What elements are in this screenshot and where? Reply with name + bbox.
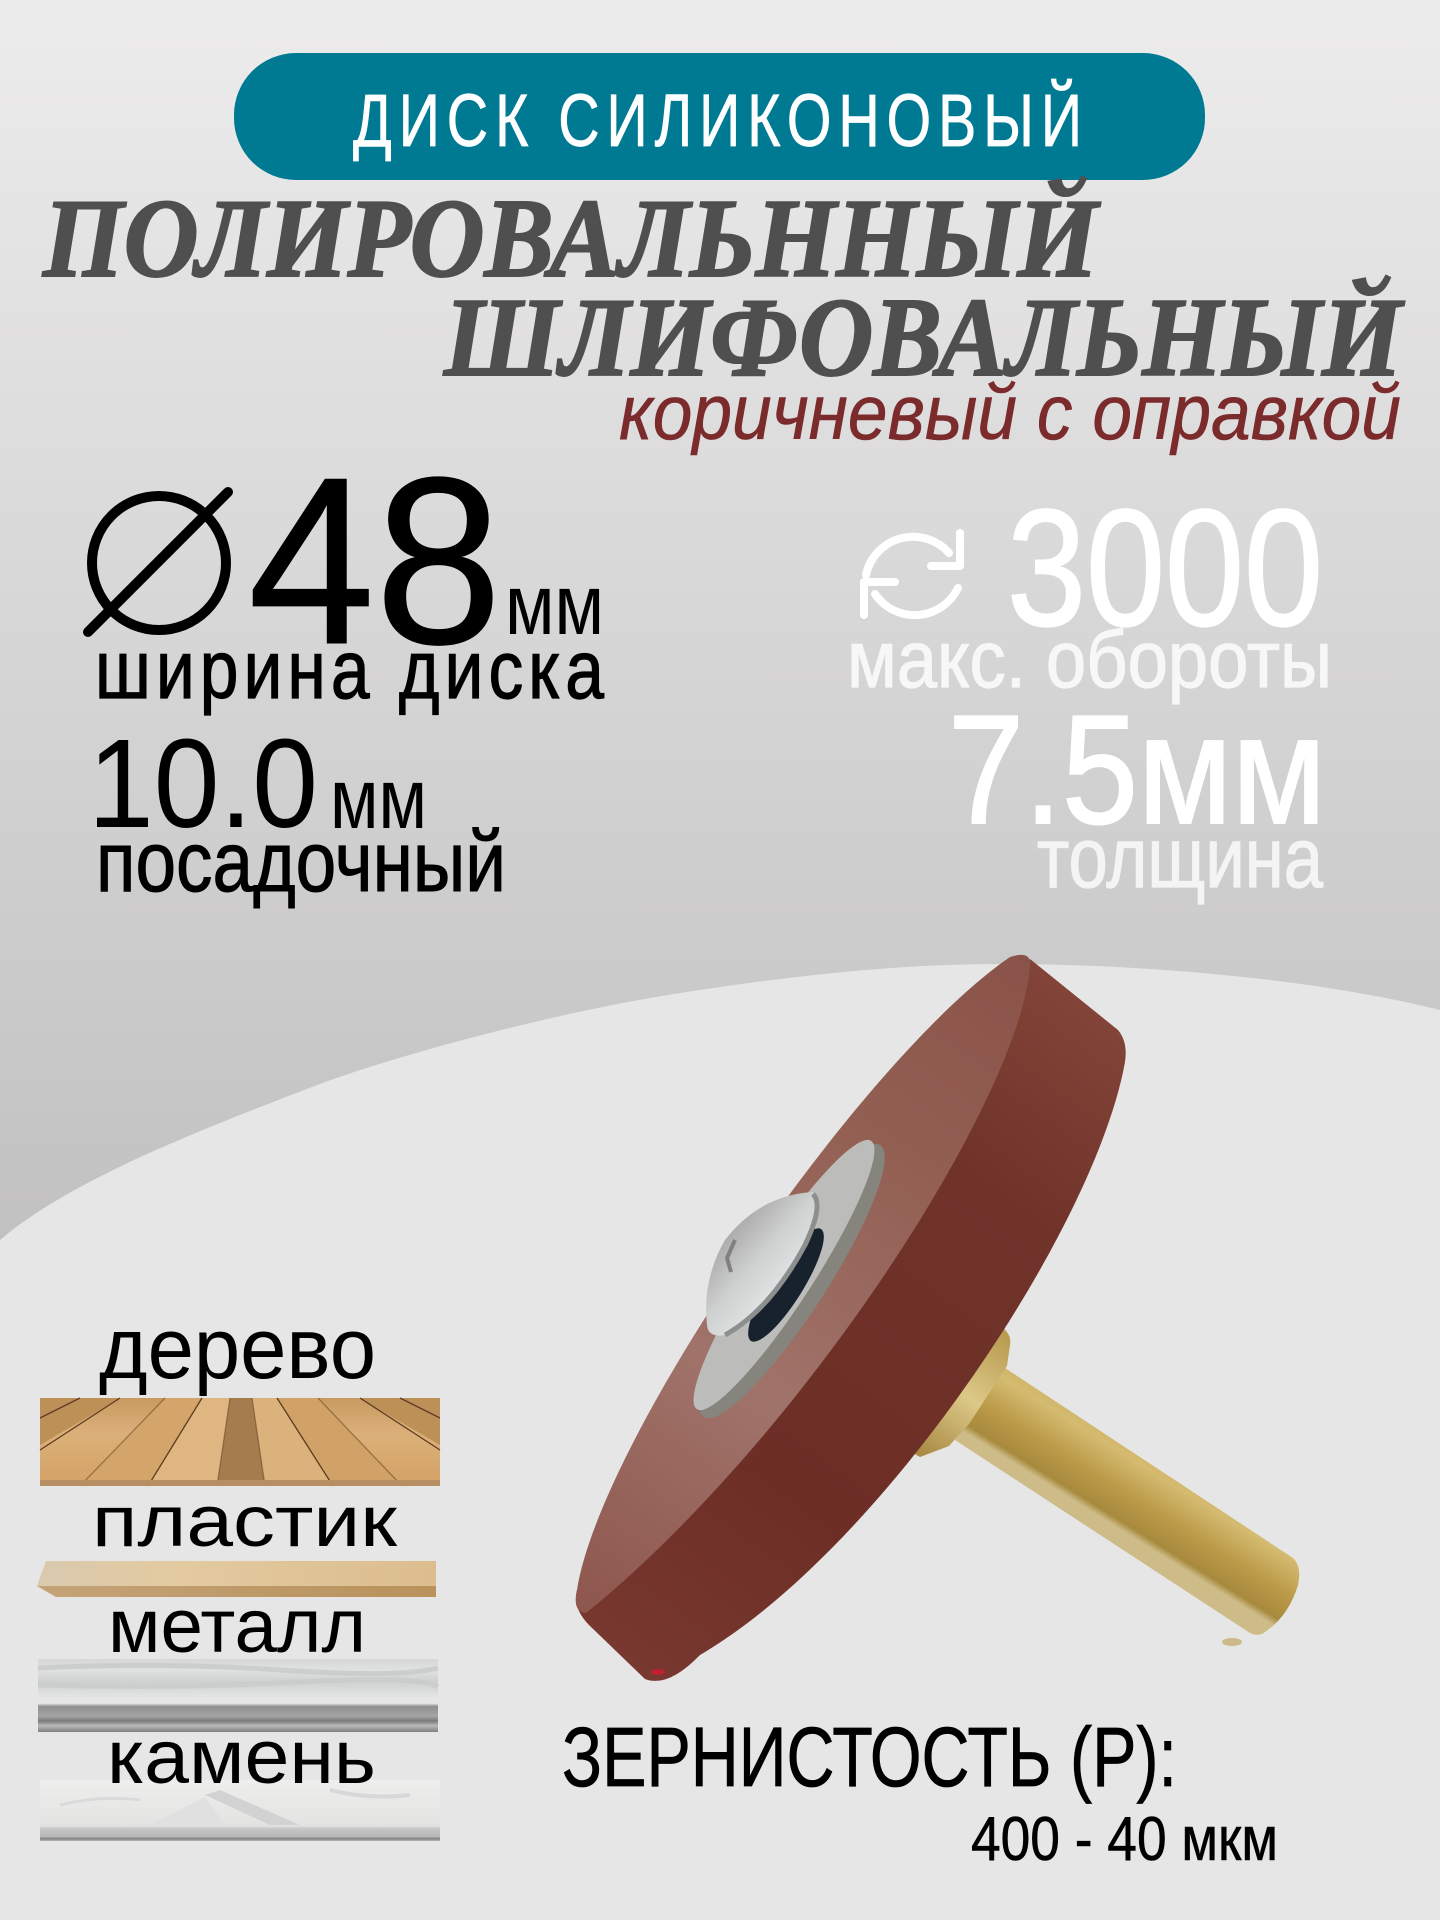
title pill bbox=[234, 53, 1205, 180]
material: metal label: металл bbox=[108, 1584, 366, 1669]
brass shaft bbox=[890, 1316, 1299, 1646]
grit value: 400 - 40 мкм bbox=[971, 1805, 1278, 1874]
disc face bbox=[576, 955, 1030, 1613]
bore size spec: 10.0 bbox=[88, 713, 318, 854]
material: stone label: камень bbox=[107, 1715, 376, 1800]
icon: rotation arrows bbox=[864, 533, 960, 615]
screw head bbox=[706, 1192, 818, 1336]
metal washer bbox=[673, 1125, 909, 1435]
disc diameter spec: 48 bbox=[248, 429, 502, 694]
thickness spec: 7.5мм bbox=[948, 683, 1326, 856]
disc diameter spec bbox=[88, 429, 609, 716]
bore size spec: посадочный bbox=[96, 815, 506, 910]
disc rim bbox=[576, 959, 1126, 1681]
material: wood sample bbox=[40, 1398, 440, 1486]
material: stone sample bbox=[40, 1780, 440, 1841]
grit label: ЗЕРНИСТОСТЬ (Р): bbox=[562, 1710, 1177, 1804]
disc diameter spec: ширина диска bbox=[95, 623, 609, 716]
light curved lower panel bbox=[0, 964, 1440, 1920]
product: polishing disc on mandrel bbox=[576, 955, 1299, 1681]
material: wood label: дерево bbox=[99, 1301, 376, 1397]
red residue spot bbox=[651, 1669, 665, 1675]
dark shadow under screw bbox=[737, 1220, 835, 1350]
bore size spec: мм bbox=[330, 752, 427, 847]
heading: polishing: ПОЛИРОВАЛЬННЫЙ bbox=[42, 176, 1101, 301]
max rpm spec: 3000 bbox=[1007, 476, 1323, 661]
max rpm spec: макс. обороты bbox=[847, 615, 1332, 705]
max rpm spec bbox=[847, 476, 1332, 705]
thickness spec: толщина bbox=[1037, 811, 1324, 906]
bore size spec bbox=[88, 713, 506, 910]
material: plastic label: пластик bbox=[92, 1482, 398, 1562]
material: metal sample bbox=[38, 1659, 438, 1732]
disc diameter spec: мм bbox=[505, 558, 604, 653]
material: plastic sample bbox=[37, 1561, 436, 1597]
title pill: ДИСК СИЛИКОНОВЫЙ bbox=[353, 79, 1089, 162]
icon: diameter symbol bbox=[88, 492, 228, 632]
